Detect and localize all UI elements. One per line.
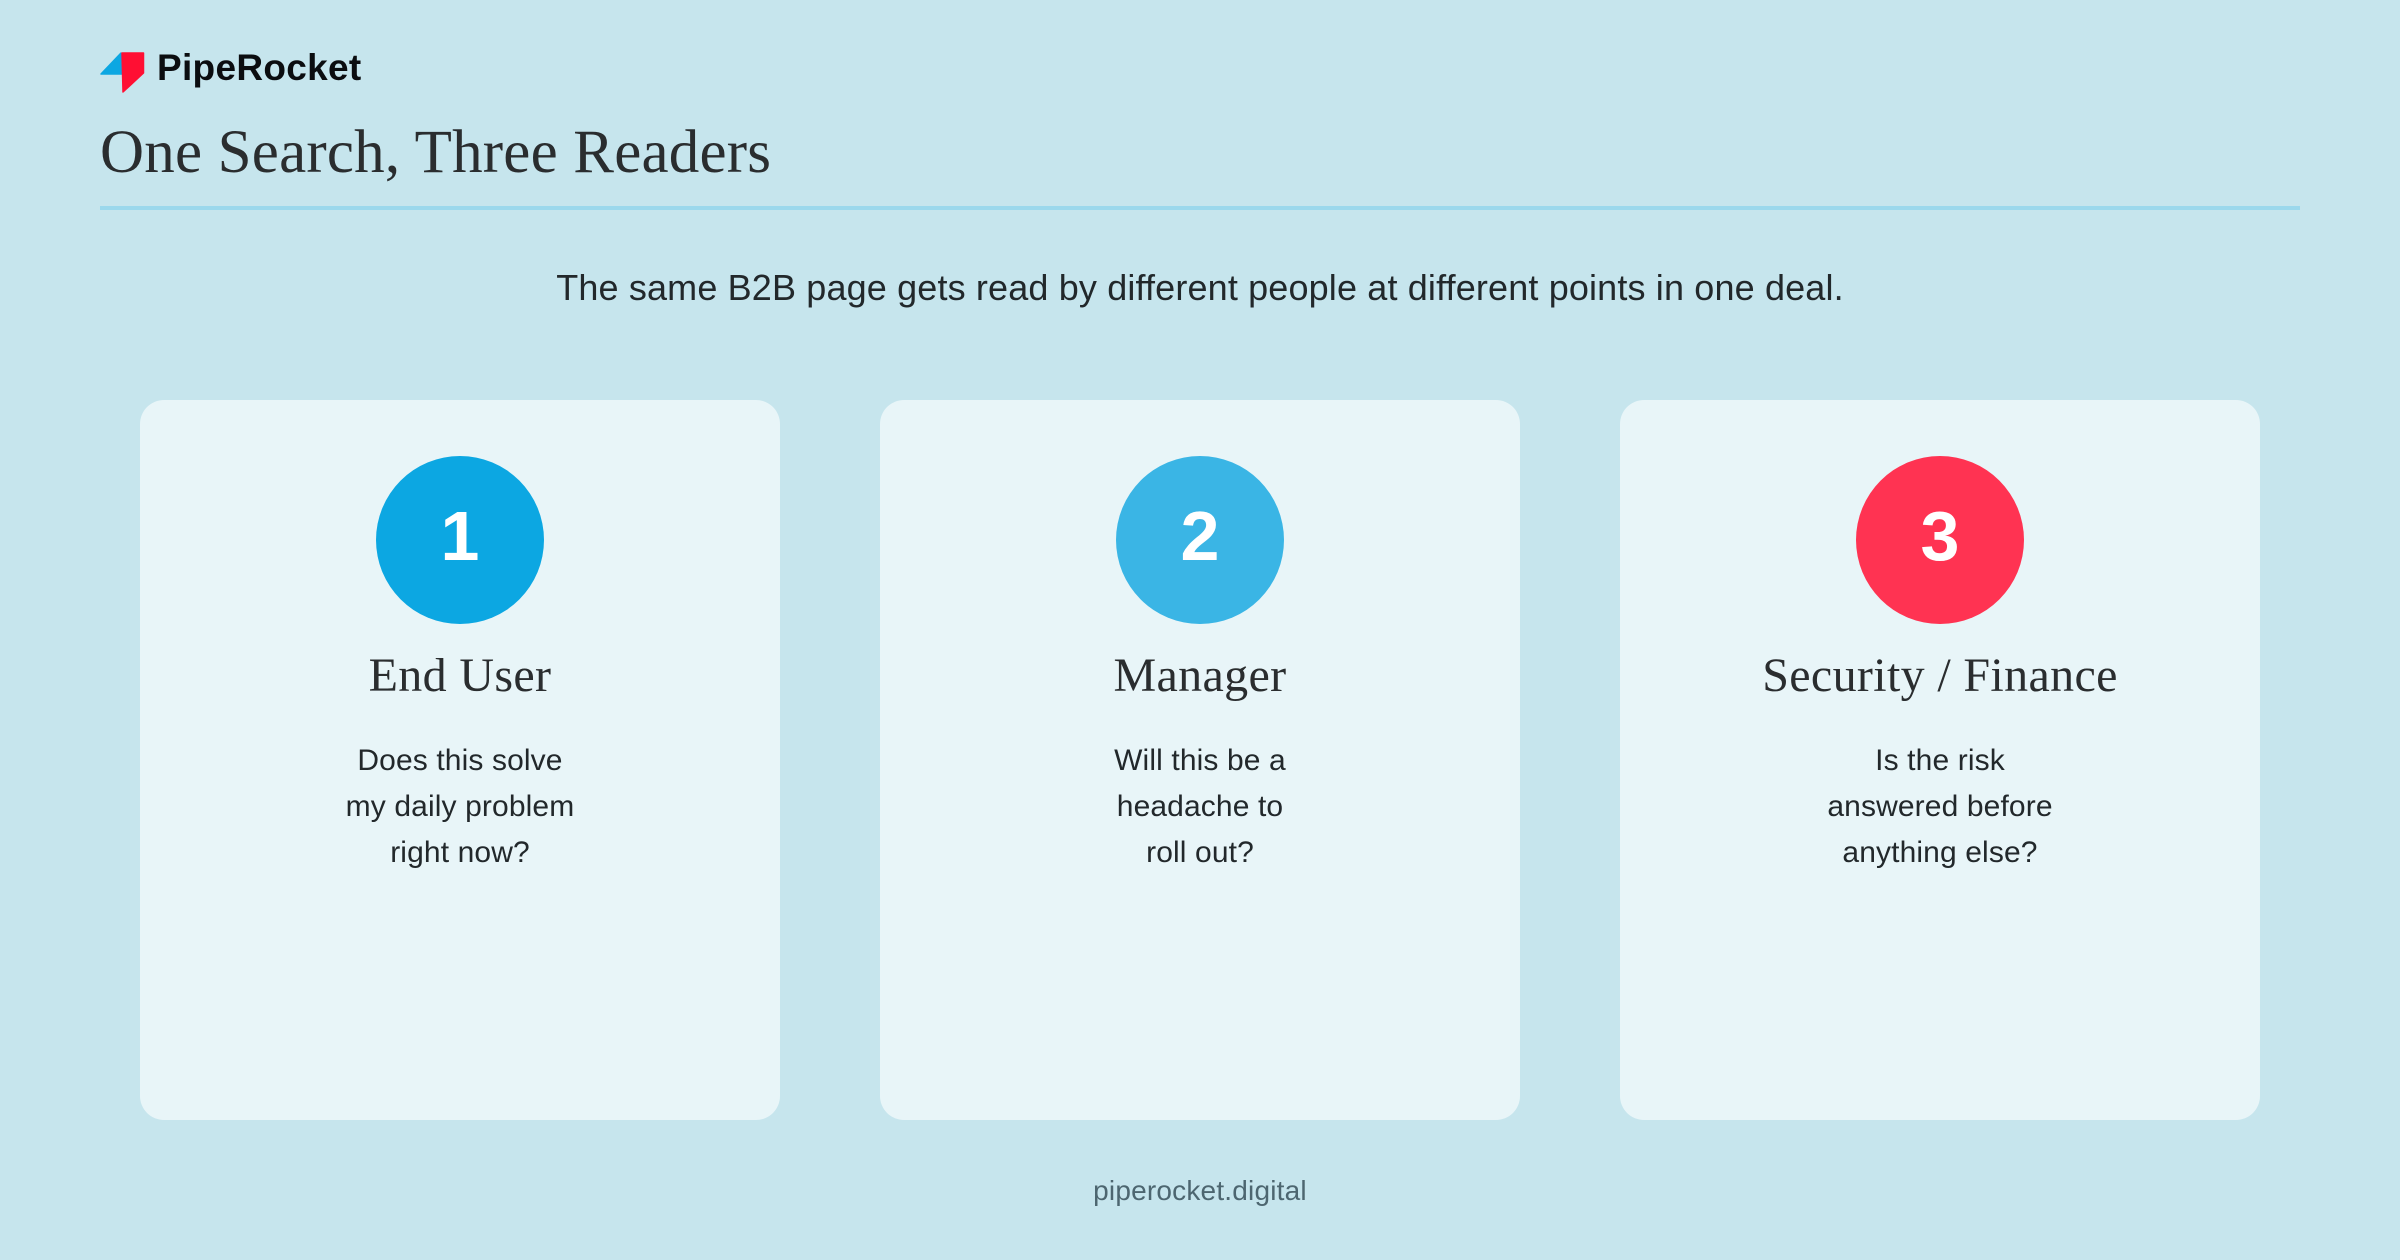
panel: Security / Finance	[1620, 400, 2260, 1120]
question text: answered before	[1827, 790, 2053, 823]
footer: piperocket.digital	[1093, 1175, 1307, 1206]
panel: End User	[140, 400, 780, 1120]
number badge 3	[1856, 456, 2024, 624]
number badge 1	[376, 456, 544, 624]
question text: headache to	[1117, 790, 1283, 823]
question text: Will this be a	[1114, 744, 1286, 777]
question text: Is the risk	[1875, 744, 2005, 777]
heading: Security / Finance: Security / Finance	[1762, 649, 2118, 702]
question text	[1827, 744, 2053, 869]
icon: rocket mark	[100, 52, 144, 93]
question text: Does this solve	[357, 744, 563, 777]
number badge 2	[1116, 456, 1284, 624]
question text: right now?	[390, 836, 530, 869]
panel: Manager	[880, 400, 1520, 1120]
question text	[346, 744, 574, 869]
question text: roll out?	[1146, 836, 1254, 869]
logo: PipeRocket	[100, 47, 362, 93]
number badge 3: 3	[1921, 497, 1959, 575]
question text: my daily problem	[346, 790, 574, 823]
subtitle: The same B2B page gets read by different people at different points in one deal.	[556, 267, 1844, 308]
heading: Manager: Manager	[1113, 649, 1287, 702]
logo wordmark: PipeRocket	[157, 47, 362, 88]
header rule	[100, 206, 2300, 210]
heading: End User: End User	[369, 649, 551, 702]
question text: anything else?	[1842, 836, 2038, 869]
title: One Search, Three Readers	[100, 119, 771, 186]
number badge 1: 1	[441, 497, 479, 575]
question text	[1114, 744, 1286, 869]
number badge 2: 2	[1181, 497, 1219, 575]
